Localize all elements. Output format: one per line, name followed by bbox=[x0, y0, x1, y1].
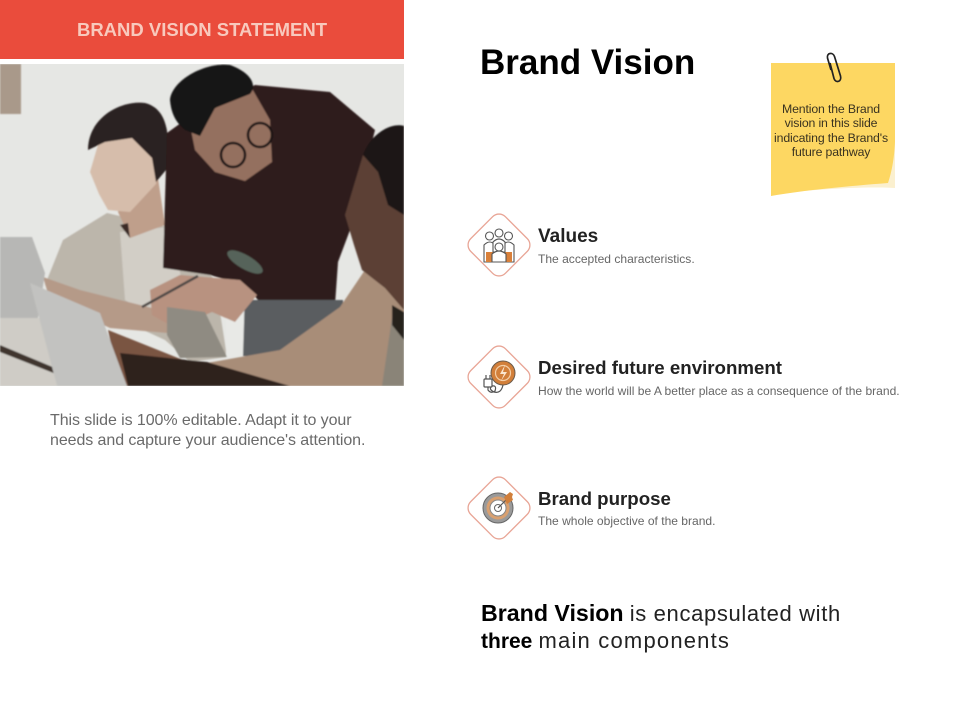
woman's hair bbox=[88, 103, 168, 182]
woman's neck bbox=[118, 178, 165, 238]
purpose diamond icon bbox=[467, 476, 531, 540]
woman's forearm bbox=[43, 277, 168, 333]
man's head bbox=[190, 85, 272, 181]
component: values bbox=[467, 213, 695, 277]
purpose description: The whole objective of the brand. bbox=[538, 514, 715, 528]
sticky note text: Mention the Brand bbox=[782, 102, 880, 116]
left description text bbox=[50, 412, 365, 448]
third man's jacket bbox=[207, 267, 404, 386]
main title: Brand Vision bbox=[480, 43, 695, 82]
values description: The accepted characteristics. bbox=[538, 252, 695, 266]
bottom statement bbox=[481, 600, 841, 653]
sticky note bbox=[771, 52, 895, 196]
woman's cuff bbox=[167, 307, 227, 358]
glasses bbox=[221, 123, 272, 167]
left description text: This slide is 100% editable. Adapt it to your bbox=[50, 412, 351, 429]
man's sweater bbox=[163, 85, 375, 305]
values heading: Values bbox=[538, 226, 598, 247]
values diamond icon bbox=[467, 213, 531, 277]
bottom statement: Brand Vision is encapsulated with bbox=[481, 600, 841, 626]
man's jeans bbox=[243, 300, 343, 356]
back laptop bbox=[0, 237, 45, 318]
header banner bbox=[0, 0, 404, 59]
bottom statement: three main components bbox=[481, 628, 730, 653]
third man's hair bbox=[363, 125, 404, 215]
woman's face bbox=[90, 130, 160, 212]
left description text: needs and capture your audience's attention. bbox=[50, 432, 365, 448]
grey shirt bbox=[382, 318, 404, 386]
team photo bbox=[0, 64, 404, 386]
dark sleeve bbox=[120, 353, 290, 386]
man's hand and pen bbox=[150, 275, 257, 328]
environment description: How the world will be A better place as a consequence of the brand. bbox=[538, 384, 900, 398]
sticky note text bbox=[774, 102, 888, 159]
sticky note text: vision in this slide bbox=[785, 116, 877, 130]
front laptop bbox=[30, 283, 127, 386]
sticky note text: future pathway bbox=[792, 145, 870, 159]
environment heading: Desired future environment bbox=[538, 357, 782, 378]
banner title: BRAND VISION STATEMENT bbox=[77, 19, 327, 40]
woman's sweater bbox=[45, 213, 227, 362]
white gap and plant bbox=[226, 290, 245, 358]
paperclip icon bbox=[826, 52, 842, 82]
table and papers bbox=[0, 318, 57, 386]
sticky note text: indicating the Brand's bbox=[774, 131, 888, 145]
third man's face bbox=[345, 150, 404, 310]
purpose heading: Brand purpose bbox=[538, 488, 671, 509]
component: brand purpose bbox=[467, 476, 715, 540]
component: desired future environment bbox=[467, 345, 900, 409]
environment diamond icon bbox=[467, 345, 530, 409]
